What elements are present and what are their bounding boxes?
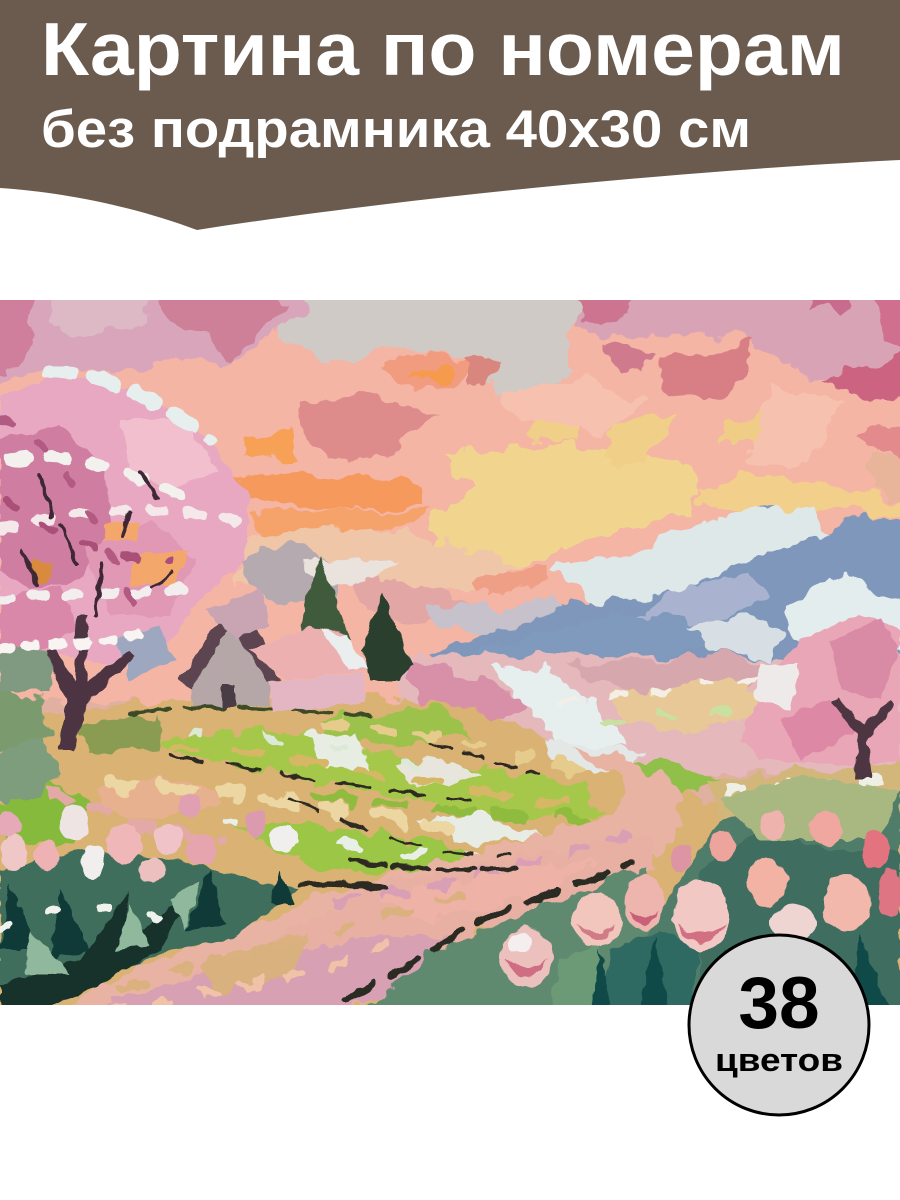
meadow ground bbox=[0, 691, 900, 1021]
path dabs bbox=[110, 835, 625, 1010]
dirt path bbox=[48, 748, 681, 1021]
pine trees bbox=[300, 558, 412, 680]
house bbox=[180, 590, 368, 712]
badge: 38 colours bbox=[689, 935, 869, 1115]
dark path border bbox=[345, 865, 630, 1000]
left tulip field bbox=[0, 793, 300, 1010]
sky bbox=[0, 279, 900, 701]
badge number: 38 bbox=[738, 963, 820, 1044]
header banner bbox=[0, 0, 900, 230]
tulips right bbox=[499, 810, 900, 987]
blossom dabs bbox=[0, 372, 235, 650]
title: Картина по номерам bbox=[41, 7, 845, 91]
mountains bbox=[429, 506, 900, 681]
right tulip field bbox=[550, 775, 900, 1010]
small blossom tree right bbox=[740, 615, 900, 778]
subtitle: без подрамника 40х30 см bbox=[41, 100, 751, 159]
badge label: цветов bbox=[715, 1042, 843, 1078]
furrows bbox=[130, 707, 540, 888]
large blossom tree left bbox=[0, 372, 250, 750]
far valley bbox=[398, 652, 900, 774]
meadow brush dabs bbox=[48, 681, 900, 856]
painting: spring landscape bbox=[0, 279, 900, 1021]
